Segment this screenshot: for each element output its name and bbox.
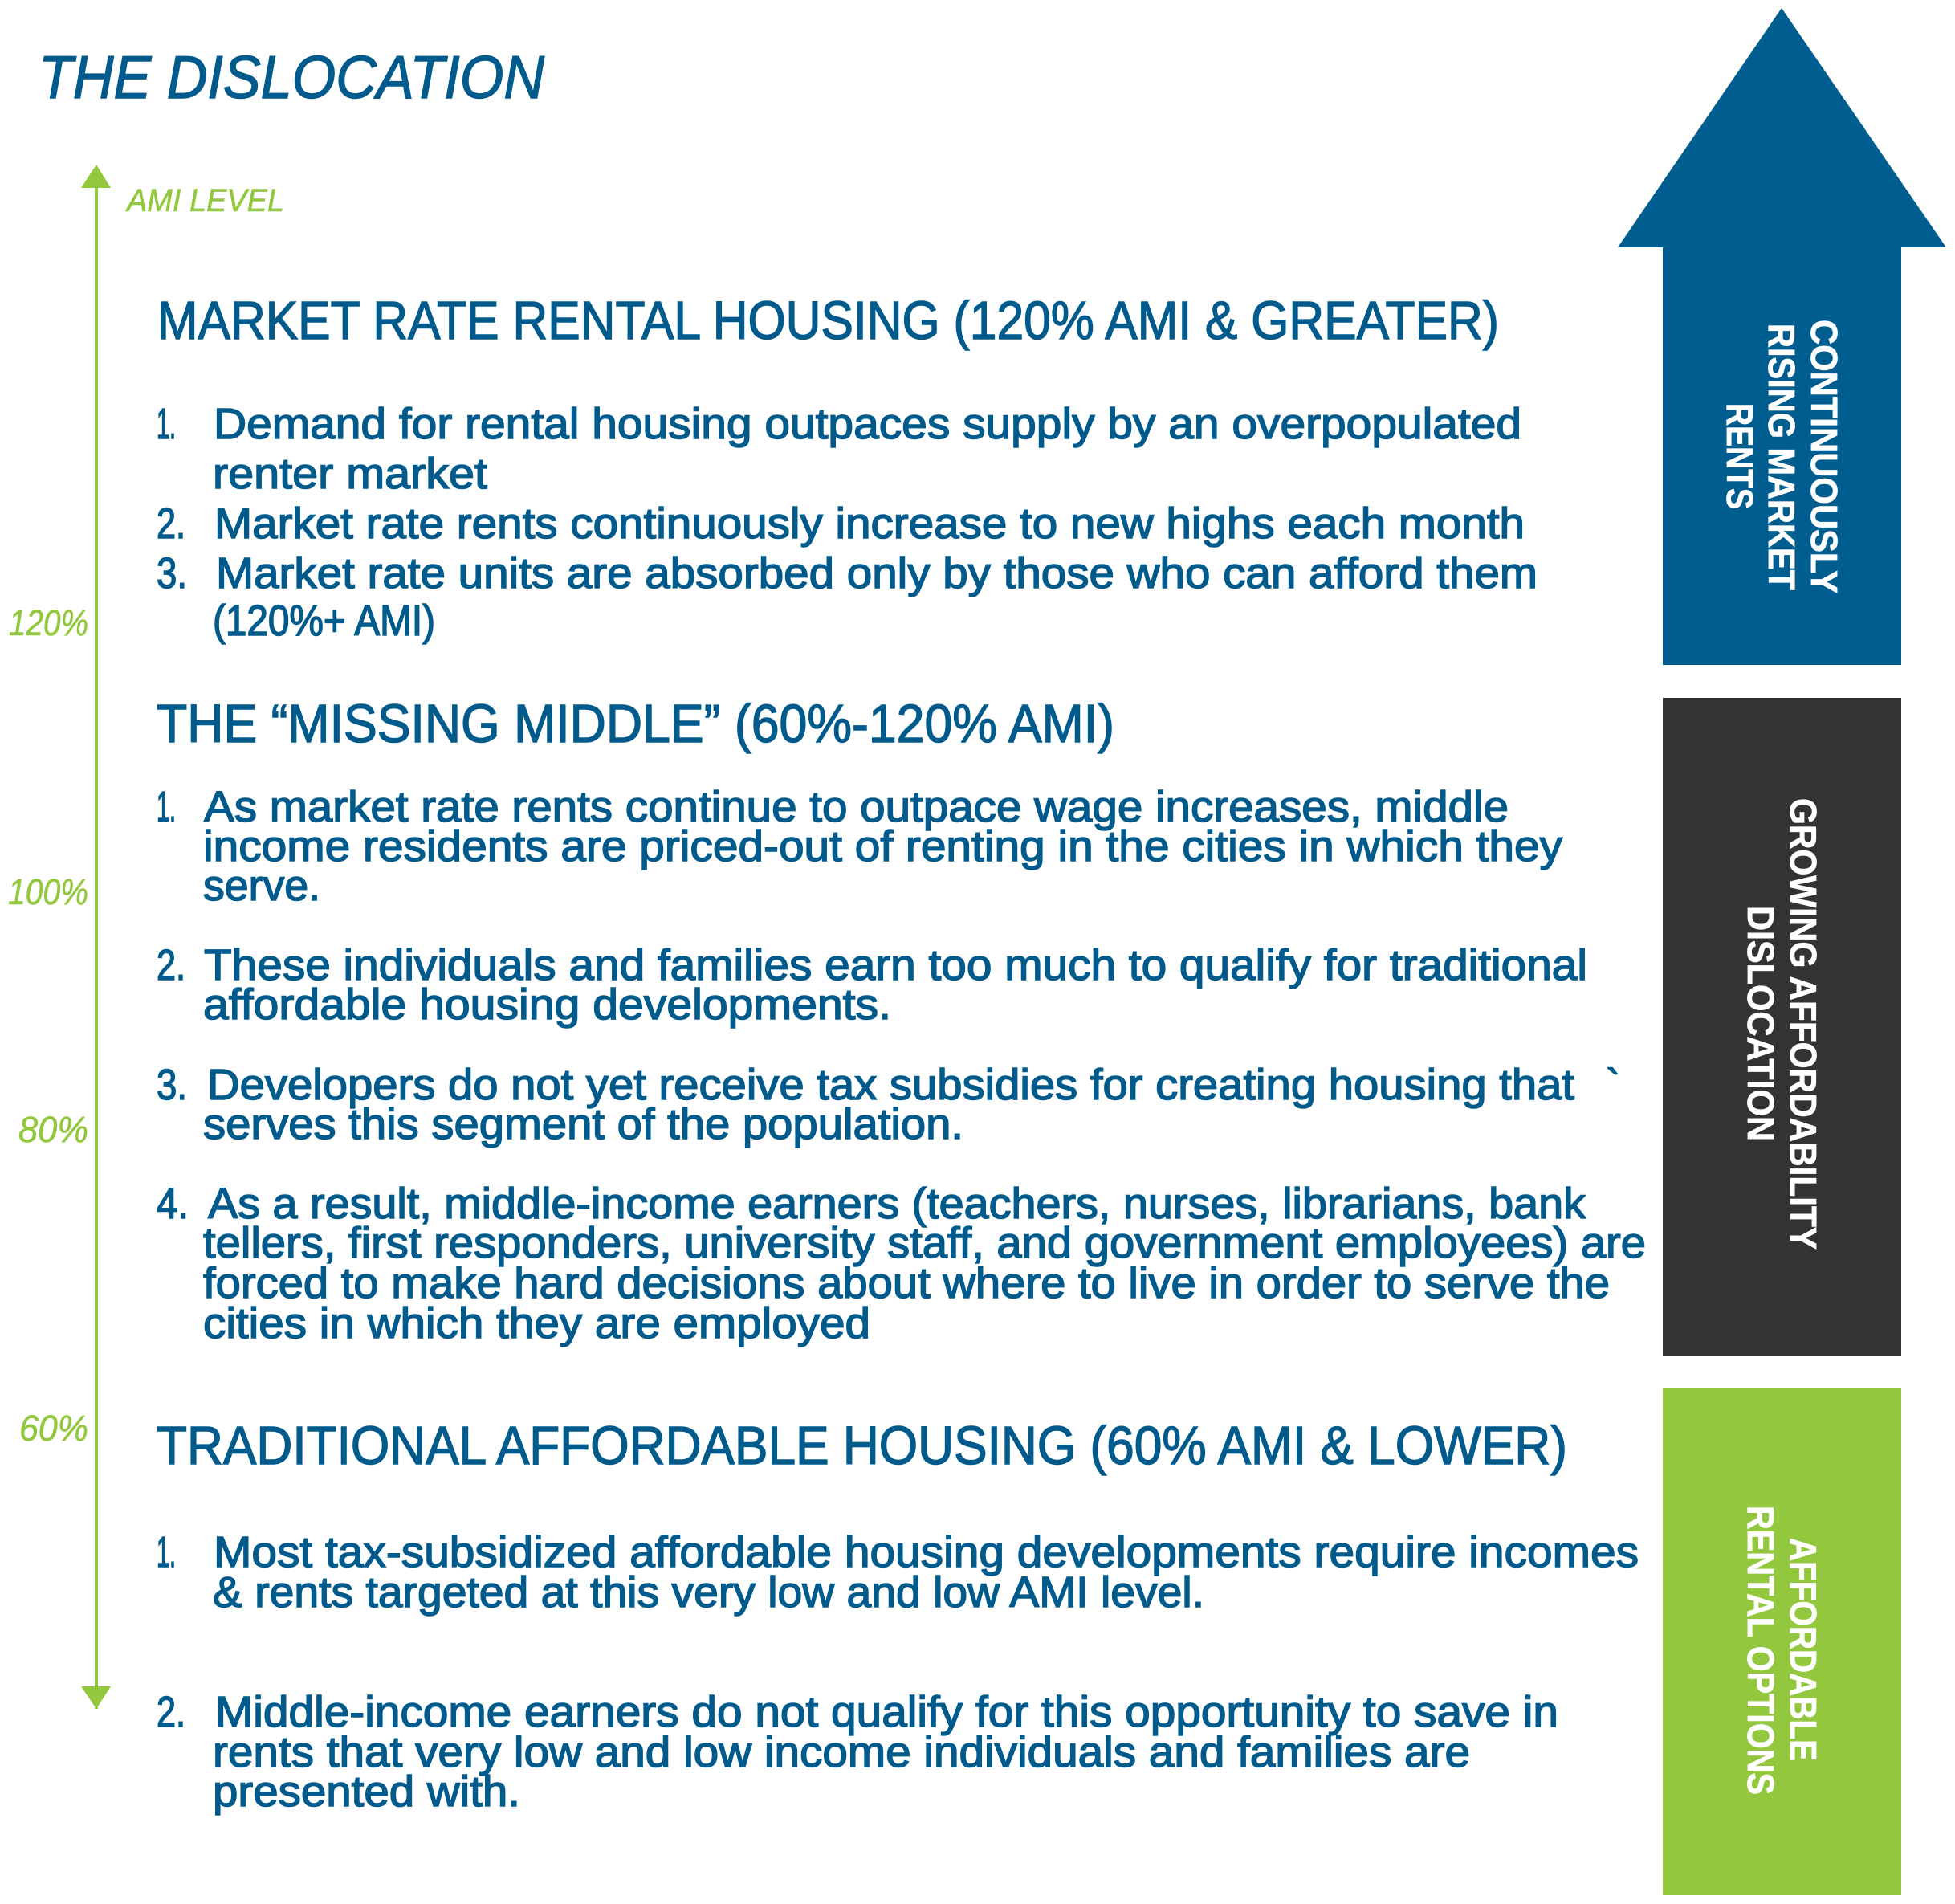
text block: missing middle list: cities in which they are employed [203, 1299, 870, 1347]
axis tick labels: 60% [19, 1408, 88, 1449]
arrow: continuously rising market rents: RISING MARKET [1761, 324, 1802, 590]
heading: missing middle: THE “MISSING MIDDLE” (60%-120% AMI) [157, 694, 1114, 754]
panel: growing affordability dislocation [1663, 698, 1901, 1356]
panel: affordable rental options: RENTAL OPTIONS [1740, 1506, 1782, 1795]
text block: market rate list: 2. [157, 499, 185, 548]
axis tick labels: 120% [9, 602, 88, 643]
text block: missing middle list: 4. [157, 1180, 189, 1228]
text block: missing middle list: These individuals and families earn too much to qualify for traditional [204, 941, 1587, 989]
text block: traditional affordable list: presented with. [213, 1767, 520, 1816]
panel: growing affordability dislocation: DISLOCATION [1740, 906, 1782, 1141]
text block: missing middle list: 1. [157, 783, 176, 831]
text block: missing middle list: serve. [203, 862, 320, 910]
text block: market rate list: Demand for rental housing outpaces supply by an overpopulated [214, 400, 1521, 448]
text block: traditional affordable list [157, 1528, 1639, 1816]
text block: missing middle list: 3. [157, 1061, 187, 1109]
arrow: continuously rising market rents: RENTS [1719, 403, 1761, 509]
panel: affordable rental options: AFFORDABLE [1782, 1538, 1824, 1761]
arrow: continuously rising market rents [1618, 8, 1946, 665]
panel: growing affordability dislocation: GROWING AFFORDABILITY [1782, 798, 1824, 1250]
text block: market rate list: 1. [157, 400, 176, 448]
text block: market rate list [157, 400, 1538, 645]
text block: missing middle list: income residents are priced-out of renting in the cities in which they [203, 822, 1562, 870]
text block: missing middle list: affordable housing developments. [203, 981, 891, 1029]
text block: missing middle list: Developers do not yet receive tax subsidies for creating housing that [207, 1061, 1574, 1109]
axis tick labels: 100% [8, 871, 88, 912]
text block: missing middle list: 2. [157, 941, 185, 989]
text block: market rate list: Market rate rents continuously increase to new highs each month [214, 499, 1525, 548]
text block: traditional affordable list: 1. [157, 1528, 176, 1576]
text block: market rate list: Market rate units are absorbed only by those who can afford them [216, 549, 1538, 597]
heading: market rate rental housing: MARKET RATE RENTAL HOUSING (120% AMI & GREATER) [157, 291, 1499, 351]
text block: traditional affordable list: & rents targeted at this very low and low AMI level. [213, 1568, 1204, 1617]
text block: missing middle list: tellers, first responders, university staff, and government employees) are [203, 1219, 1646, 1267]
text block: market rate list: renter market [213, 450, 487, 498]
text block: traditional affordable list: 2. [157, 1688, 185, 1736]
axis tick labels [8, 602, 88, 1449]
arrow: continuously rising market rents: CONTINUOUSLY [1803, 320, 1845, 593]
text block: missing middle list: As a result, middle-income earners (teachers, nurses, librarians, bank [208, 1180, 1586, 1228]
text block: traditional affordable list: Middle-income earners do not qualify for this opportunity to save in [215, 1688, 1558, 1736]
title: THE DISLOCATION [39, 43, 545, 111]
text block: traditional affordable list: Most tax-subsidized affordable housing developments require incomes [214, 1528, 1639, 1576]
heading: traditional affordable housing: TRADITIONAL AFFORDABLE HOUSING (60% AMI & LOWER) [157, 1416, 1567, 1476]
text block: missing middle list: As market rate rents continue to outpace wage increases, middle [204, 783, 1509, 831]
text block: market rate list: (120%+ AMI) [213, 597, 435, 645]
text block: missing middle list: ` [1606, 1061, 1620, 1109]
text block: market rate list: 3. [157, 549, 187, 597]
text block: missing middle list [157, 783, 1646, 1347]
axis label: AMI level: AMI LEVEL [125, 183, 284, 218]
AMI axis: double-headed arrow [81, 165, 111, 1709]
text block: missing middle list: forced to make hard decisions about where to live in order to serve the [203, 1259, 1610, 1307]
text block: missing middle list: serves this segment of the population. [203, 1100, 963, 1148]
text block: traditional affordable list: rents that very low and low income individuals and families are [213, 1728, 1470, 1776]
axis tick labels: 80% [18, 1109, 88, 1150]
panel: affordable rental options [1663, 1388, 1901, 1895]
